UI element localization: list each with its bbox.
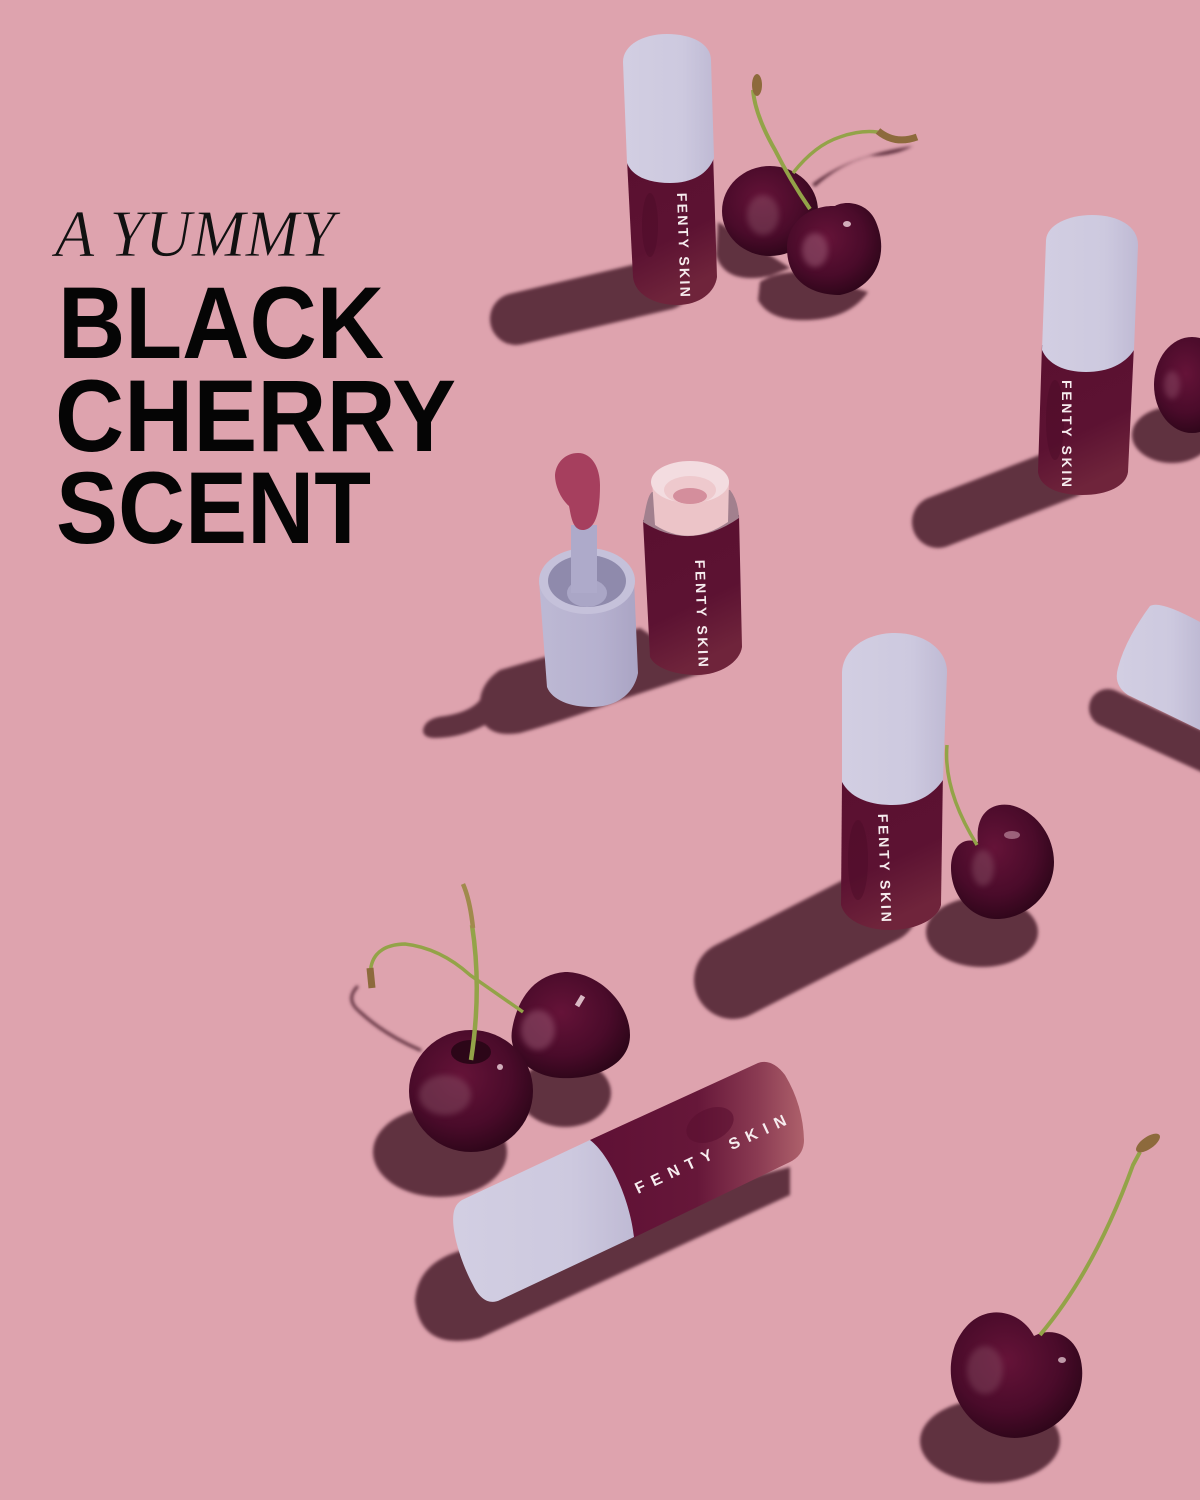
bottle label: FENTY SKIN	[674, 193, 694, 297]
bottle label: FENTY SKIN	[692, 560, 712, 667]
title: script line: A YUMMY	[51, 197, 341, 271]
open bottle body	[643, 515, 742, 675]
title: bold lines: BLACK	[58, 266, 384, 380]
cherries: top pair	[722, 74, 917, 295]
bottle cap	[623, 34, 714, 183]
cherries: lower left pair	[370, 884, 630, 1152]
bottle body	[841, 770, 943, 930]
bottle body	[1038, 345, 1134, 495]
bottle cap	[453, 1140, 634, 1302]
bottle body	[627, 152, 717, 305]
bottle neck	[652, 480, 729, 536]
bottle label: FENTY SKIN	[633, 1112, 789, 1198]
bottle: center right	[841, 633, 947, 930]
shadows	[352, 146, 1200, 1483]
title	[51, 197, 456, 565]
cherry: right edge	[1154, 337, 1200, 433]
title: bold lines: CHERRY	[55, 359, 456, 473]
cherry: center right	[947, 745, 1054, 919]
bottle: lying	[453, 1062, 804, 1302]
bottle: top	[623, 34, 717, 305]
bottle label: FENTY SKIN	[1059, 380, 1075, 487]
cherry stems	[753, 90, 810, 209]
open cap	[539, 580, 638, 707]
bottle label: FENTY SKIN	[875, 814, 895, 922]
cherry stems	[471, 925, 477, 1060]
bottle cap	[1042, 215, 1138, 372]
bottle: right	[1038, 215, 1138, 495]
bottle cap	[842, 633, 947, 805]
title: bold lines: SCENT	[56, 451, 371, 565]
lying cap: right edge	[1117, 605, 1200, 730]
title: bold lines	[55, 266, 456, 565]
applicator wand	[571, 525, 597, 593]
bottle body	[590, 1062, 804, 1238]
open bottle and applicator	[539, 453, 742, 707]
cherry: bottom right	[951, 1130, 1163, 1438]
